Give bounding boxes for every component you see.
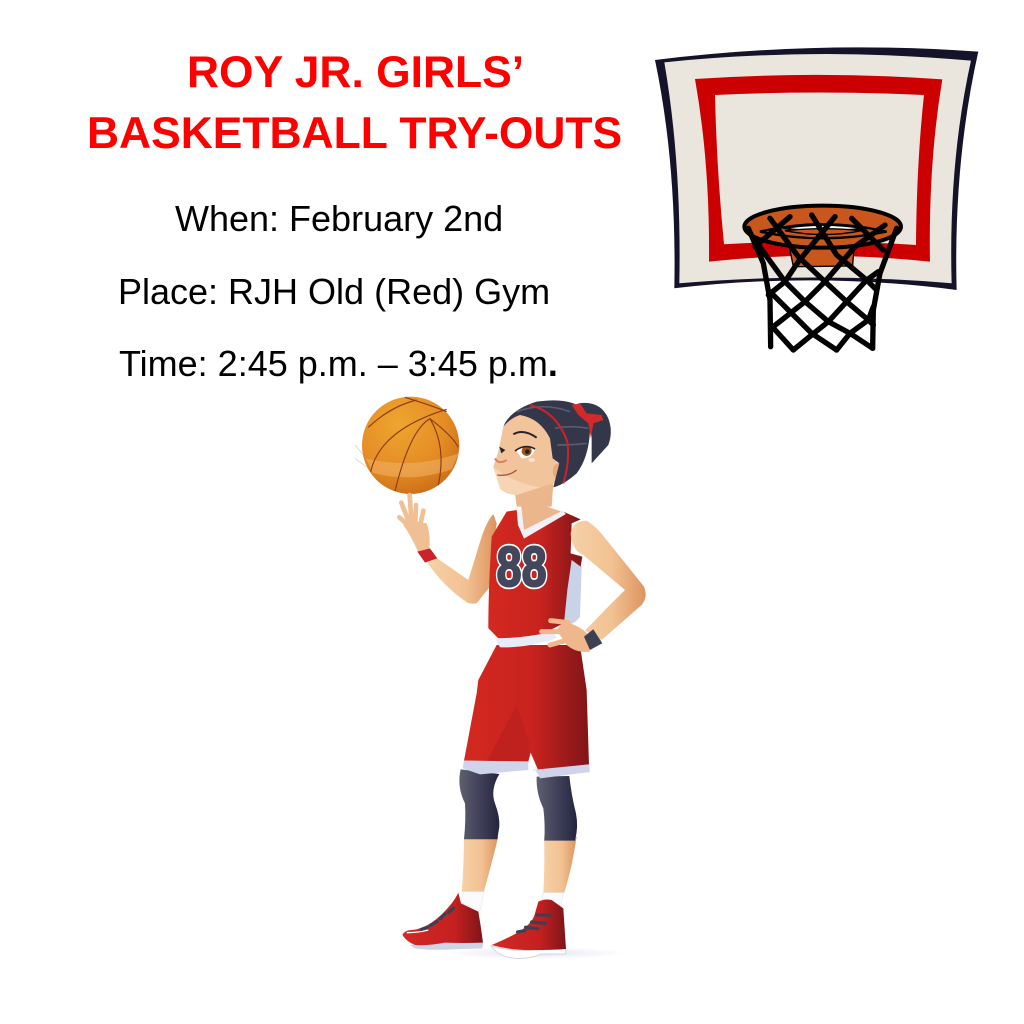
waistband bbox=[495, 632, 557, 647]
text: when: When: February 2nd bbox=[175, 198, 503, 239]
eye bbox=[516, 446, 535, 458]
torso and arms bbox=[399, 480, 646, 652]
shorts bbox=[463, 645, 590, 778]
headband bbox=[530, 405, 568, 483]
jersey bbox=[488, 510, 582, 640]
right hand bbox=[542, 621, 590, 652]
net bbox=[748, 215, 897, 350]
socks bbox=[461, 892, 484, 911]
text: place: Place: RJH Old (Red) Gym bbox=[118, 271, 550, 312]
wristband left bbox=[417, 548, 437, 563]
neck shadow bbox=[515, 483, 553, 507]
title: ROY JR. GIRLS’ bbox=[187, 48, 524, 97]
left lower leg bbox=[462, 837, 498, 893]
number 88: 88 bbox=[497, 535, 547, 598]
title bbox=[87, 48, 622, 158]
ponytail bbox=[578, 403, 611, 463]
raised arm bbox=[427, 514, 497, 604]
number 88: 88 bbox=[497, 535, 547, 598]
legs bbox=[459, 769, 577, 893]
bow bbox=[572, 403, 603, 438]
hair bbox=[503, 400, 590, 487]
hoop rim and net bbox=[744, 206, 901, 350]
title: BASKETBALL TRY-OUTS bbox=[87, 109, 622, 158]
right shoe bbox=[491, 946, 566, 958]
ground shadow bbox=[445, 947, 625, 959]
right lower leg bbox=[543, 837, 577, 893]
shoes and socks bbox=[402, 892, 566, 958]
hand with fingers bbox=[399, 495, 430, 553]
eyebrow bbox=[513, 432, 537, 438]
right arm bbox=[571, 521, 646, 640]
left tight bbox=[459, 769, 499, 839]
collar bbox=[517, 509, 566, 539]
face bbox=[493, 412, 558, 495]
head bbox=[493, 400, 611, 507]
left shoe bbox=[410, 943, 483, 950]
text: time: Time: 2:45 p.m. – 3:45 p.m. bbox=[119, 343, 558, 384]
neck bbox=[520, 480, 562, 532]
ear bbox=[553, 462, 571, 480]
nose bbox=[495, 458, 507, 462]
icon: basketball hoop and backboard bbox=[655, 47, 978, 350]
cheek bbox=[528, 458, 535, 462]
basketball bbox=[355, 397, 459, 494]
right tight bbox=[537, 776, 577, 841]
illustration: girl basketball player bbox=[355, 397, 646, 959]
backboard bbox=[655, 47, 978, 290]
mouth bbox=[497, 470, 517, 475]
jersey side panel bbox=[562, 557, 582, 625]
wristband right bbox=[584, 629, 602, 650]
